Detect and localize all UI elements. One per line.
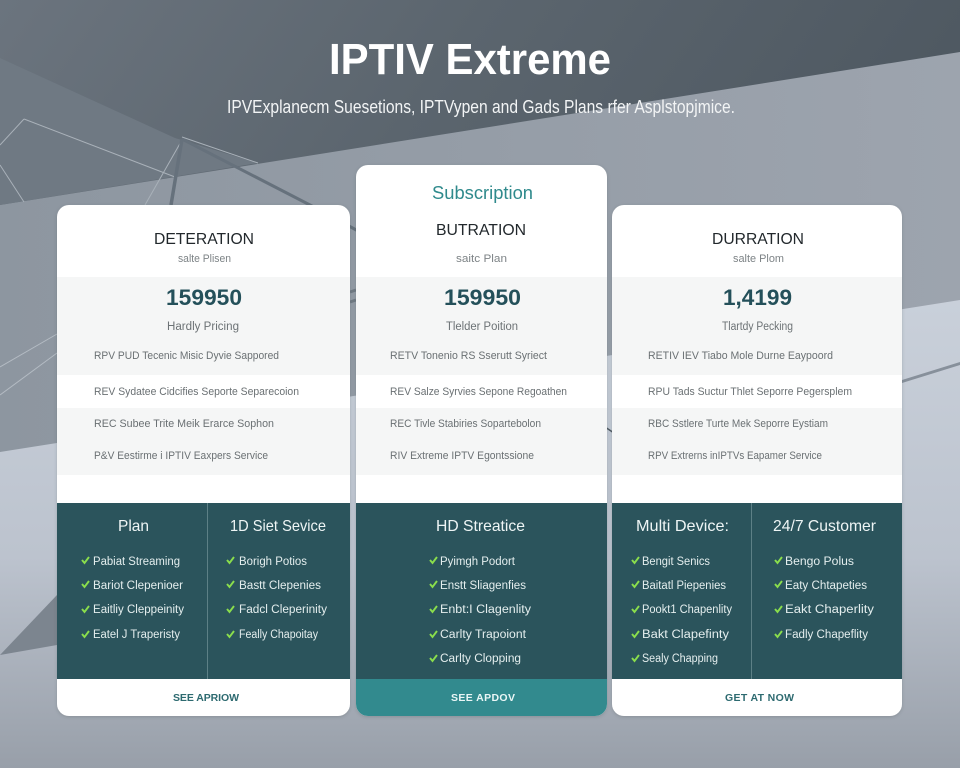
feature rows: RIV Extreme IPTV Egontssione xyxy=(390,450,534,462)
teal features panel: Eatel J Traperisty xyxy=(93,629,180,641)
price: 159950 xyxy=(166,285,242,310)
price: 1,4199 xyxy=(723,285,792,310)
teal features panel: Plan xyxy=(118,518,149,535)
feature rows: REC Subee Trite Meik Erarce Sophon xyxy=(94,418,274,430)
feature rows: REC Tivle Stabiries Sopartebolon xyxy=(390,418,541,430)
button: SEE APDOV xyxy=(451,692,515,704)
feature rows: RBC Sstlere Turte Mek Seporre Eystiam xyxy=(648,418,828,430)
feature rows: RETIV IEV Tiabo Mole Durne Eaypoord xyxy=(648,350,833,362)
subscription label: Subscription xyxy=(432,183,533,203)
plan heading: BUTRATION xyxy=(436,222,526,239)
panel: right plan card xyxy=(612,205,902,716)
teal features panel: Fadly Chapeflity xyxy=(785,629,868,641)
teal features panel: 24/7 Customer xyxy=(773,518,877,535)
button: SEE APRIOW xyxy=(173,692,239,704)
feature rows: REV Sydatee Cidcifies Seporte Separecoion xyxy=(94,386,299,398)
teal features panel: Bariot Clepenioer xyxy=(93,580,183,592)
plan subheading: salte Plom xyxy=(733,253,784,265)
teal features panel: Bengo Polus xyxy=(785,556,854,568)
teal features panel xyxy=(612,503,902,679)
teal features panel: Pookt1 Chapenlity xyxy=(642,604,732,616)
teal features panel: Sealy Chapping xyxy=(642,653,718,665)
price label: Hardly Pricing xyxy=(167,321,239,333)
teal features panel: Carlty Clopping xyxy=(440,653,521,665)
teal features panel xyxy=(356,503,607,679)
button: GET AT NOW xyxy=(725,692,794,704)
feature rows xyxy=(648,350,852,462)
panel: left plan card xyxy=(57,205,350,716)
price label: Tlelder Poition xyxy=(446,321,518,333)
teal features panel: Pyimgh Podort xyxy=(440,556,516,568)
teal features panel: Carlty Trapoiont xyxy=(440,629,527,641)
price label: Tlartdy Pecking xyxy=(722,321,793,333)
teal features panel: Eaty Chtapeties xyxy=(785,580,867,592)
teal features panel: Bastt Clepenies xyxy=(239,580,321,592)
teal features panel: Bakt Clapefinty xyxy=(642,629,729,641)
plan heading: DURRATION xyxy=(712,231,804,248)
teal features panel: Borigh Potios xyxy=(239,556,307,568)
plan heading: DETERATION xyxy=(154,231,254,248)
teal features panel: 1D Siet Sevice xyxy=(230,518,326,535)
feature rows: P&V Eestirme i IPTIV Eaxpers Service xyxy=(94,450,268,462)
teal features panel: Fadcl Cleperinity xyxy=(239,604,327,616)
teal features panel: Enstt Sliagenfies xyxy=(440,580,526,592)
teal features panel: Feally Chapoitay xyxy=(239,629,318,641)
plan subheading: salte Plisen xyxy=(178,253,231,265)
panel: middle plan card xyxy=(356,165,607,716)
teal features panel xyxy=(57,503,350,679)
feature rows: RETV Tonenio RS Sserutt Syriect xyxy=(390,350,547,362)
feature rows: RPV Extrerns inIPTVs Eapamer Service xyxy=(648,450,822,462)
feature rows: RPU Tads Suctur Thlet Seporre Pegersplem xyxy=(648,386,852,398)
feature rows xyxy=(390,350,567,462)
teal features panel: Bengit Senics xyxy=(642,556,710,568)
teal features panel: Eakt Chaperlity xyxy=(785,604,874,616)
title: IPTIV Extreme xyxy=(329,35,611,84)
teal features panel: HD Streatice xyxy=(436,518,525,535)
plan subheading: saitc Plan xyxy=(456,253,507,265)
feature rows: RPV PUD Tecenic Misic Dyvie Sappored xyxy=(94,350,279,362)
feature rows: REV Salze Syrvies Sepone Regoathen xyxy=(390,386,567,398)
button xyxy=(356,679,607,716)
teal features panel: Enbt:I Clagenlity xyxy=(440,604,531,616)
subtitle: IPVExplanecm Suesetions, IPTVypen and Gads Plans rfer Asplstopjmice. xyxy=(227,97,735,117)
teal features panel: Multi Device: xyxy=(636,518,729,535)
teal features panel: Pabiat Streaming xyxy=(93,556,180,568)
teal features panel: Eaitliy Cleppeinity xyxy=(93,604,184,616)
feature rows xyxy=(94,350,299,462)
price: 159950 xyxy=(444,285,521,310)
teal features panel: Baitatl Piepenies xyxy=(642,580,726,592)
